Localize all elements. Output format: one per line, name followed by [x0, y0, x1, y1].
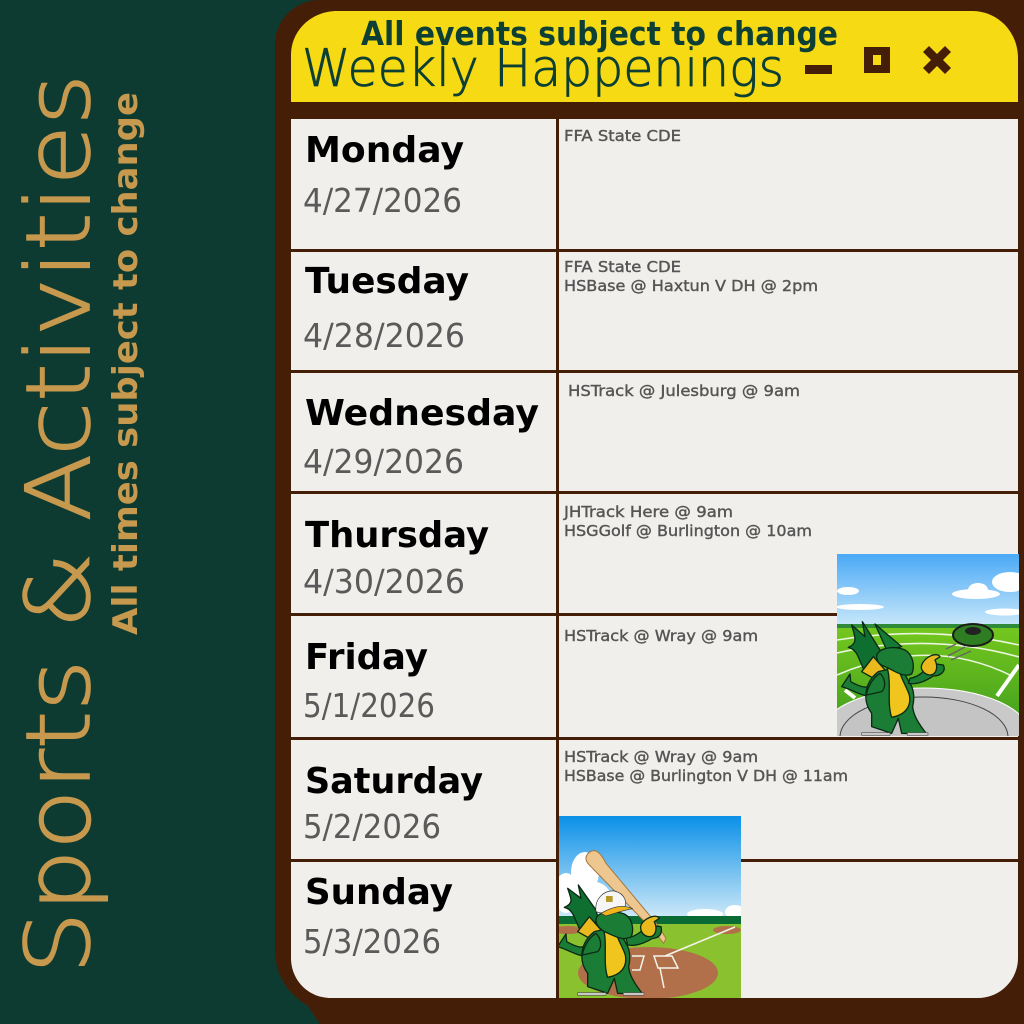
row: Tuesday [291, 252, 1018, 370]
day label: Sunday [305, 872, 453, 913]
date: 4/29/2026 [303, 442, 464, 481]
date: 5/3/2026 [303, 922, 441, 961]
side subtitle: all times subject to change: All times subject to change [106, 92, 146, 635]
events: HSBase @ Burlington V DH @ 11am [564, 767, 848, 785]
header bar [291, 11, 1018, 102]
day label: Monday [305, 130, 464, 171]
day label: Tuesday [305, 261, 469, 302]
icon: close [923, 46, 951, 74]
events [564, 748, 848, 785]
day label: Thursday [305, 515, 489, 556]
events: FFA State CDE [564, 258, 681, 276]
events: FFA State CDE [564, 127, 681, 145]
events: HSGGolf @ Burlington @ 10am [564, 522, 812, 540]
header title: Weekly Happenings [302, 39, 784, 99]
row: Sunday [291, 862, 1018, 998]
icon: maximize [864, 47, 890, 73]
events: HSTrack @ Wray @ 9am [564, 748, 758, 766]
events [563, 503, 812, 540]
bat [586, 851, 666, 943]
day label: Wednesday [305, 393, 539, 434]
row: Friday [291, 616, 1018, 737]
row: Monday [291, 119, 1018, 249]
day label: Friday [305, 637, 428, 678]
events [564, 258, 818, 295]
side title: Sports & Activities: Sports & Activities [7, 74, 110, 974]
date: 4/30/2026 [303, 562, 465, 601]
discus [946, 624, 993, 660]
dragon [842, 622, 944, 735]
illustration: dragon throwing discus [837, 554, 1019, 736]
row: Thursday [291, 494, 1018, 613]
row: Wednesday [291, 373, 1018, 491]
events: HSTrack @ Wray @ 9am [564, 627, 758, 645]
events: JHTrack Here @ 9am [563, 503, 733, 521]
row: Saturday [291, 740, 1018, 859]
header note: All events subject to change [361, 14, 838, 53]
date: 4/28/2026 [303, 316, 465, 355]
dragon [558, 851, 666, 995]
icon: minimize [805, 65, 832, 74]
events: HSTrack @ Julesburg @ 9am [568, 382, 800, 400]
illustration: dragon batting [554, 816, 745, 999]
window frame [275, 0, 1024, 1024]
day label: Saturday [305, 761, 483, 802]
events: HSBase @ Haxtun V DH @ 2pm [564, 277, 818, 295]
date: 5/2/2026 [303, 807, 441, 846]
date: 5/1/2026 [303, 686, 435, 725]
date: 4/27/2026 [303, 181, 462, 220]
cap [596, 891, 626, 913]
